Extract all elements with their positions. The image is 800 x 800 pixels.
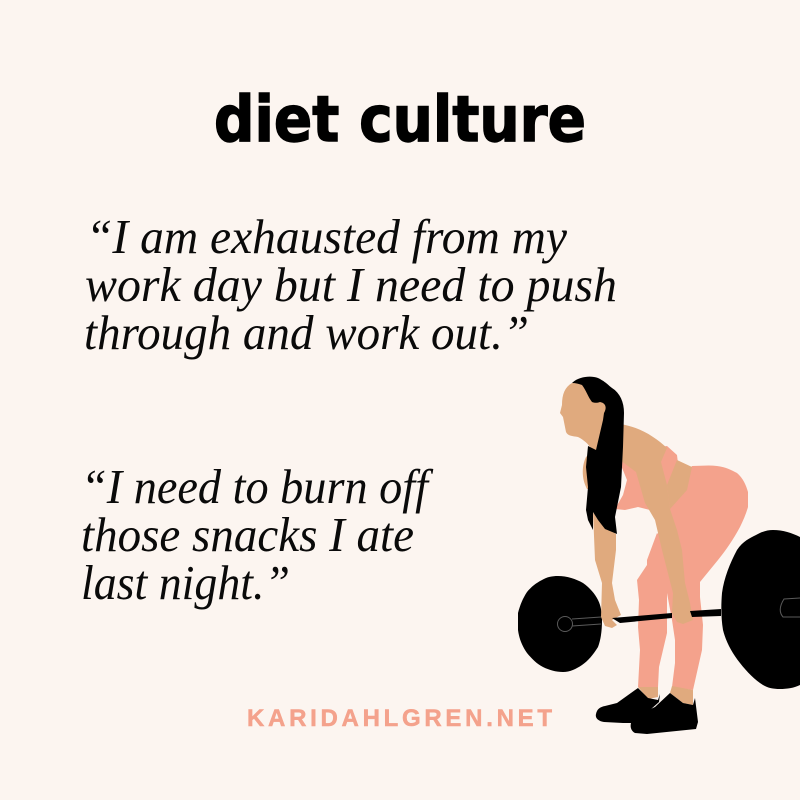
quote: burn off snacks: last night.” xyxy=(81,555,290,610)
barbell collar details xyxy=(558,598,800,632)
shoulder and near arm xyxy=(620,424,693,624)
title: diet culture xyxy=(214,83,586,156)
quote: exhausted from work day: work day but I need to push xyxy=(85,257,617,312)
barbell plate: far left xyxy=(518,576,602,672)
shoe: far xyxy=(596,688,660,723)
quote: burn off snacks: “I need to burn off xyxy=(81,459,434,514)
waist xyxy=(667,460,692,509)
quote: burn off snacks: those snacks I ate xyxy=(81,507,414,562)
head and neck xyxy=(560,380,608,452)
barbell shaft xyxy=(612,609,721,623)
quote: exhausted from work day xyxy=(84,209,617,360)
far shoulder under hair xyxy=(583,455,590,489)
quote: exhausted from work day: through and work out.” xyxy=(84,305,529,360)
quote: burn off snacks xyxy=(81,459,434,610)
far arm xyxy=(593,512,621,628)
footer website: KARIDAHLGREN.NET xyxy=(247,705,552,732)
far leg xyxy=(637,533,672,687)
shoe: near xyxy=(631,693,698,734)
leotard torso xyxy=(615,446,680,510)
barbell plate: near right xyxy=(721,530,800,689)
quote: exhausted from work day: “I am exhausted from my xyxy=(86,209,567,264)
hair xyxy=(572,377,624,534)
near leg and hip xyxy=(655,466,748,690)
bare ankles xyxy=(638,686,693,705)
illustration: woman deadlifting a barbell xyxy=(518,377,800,734)
